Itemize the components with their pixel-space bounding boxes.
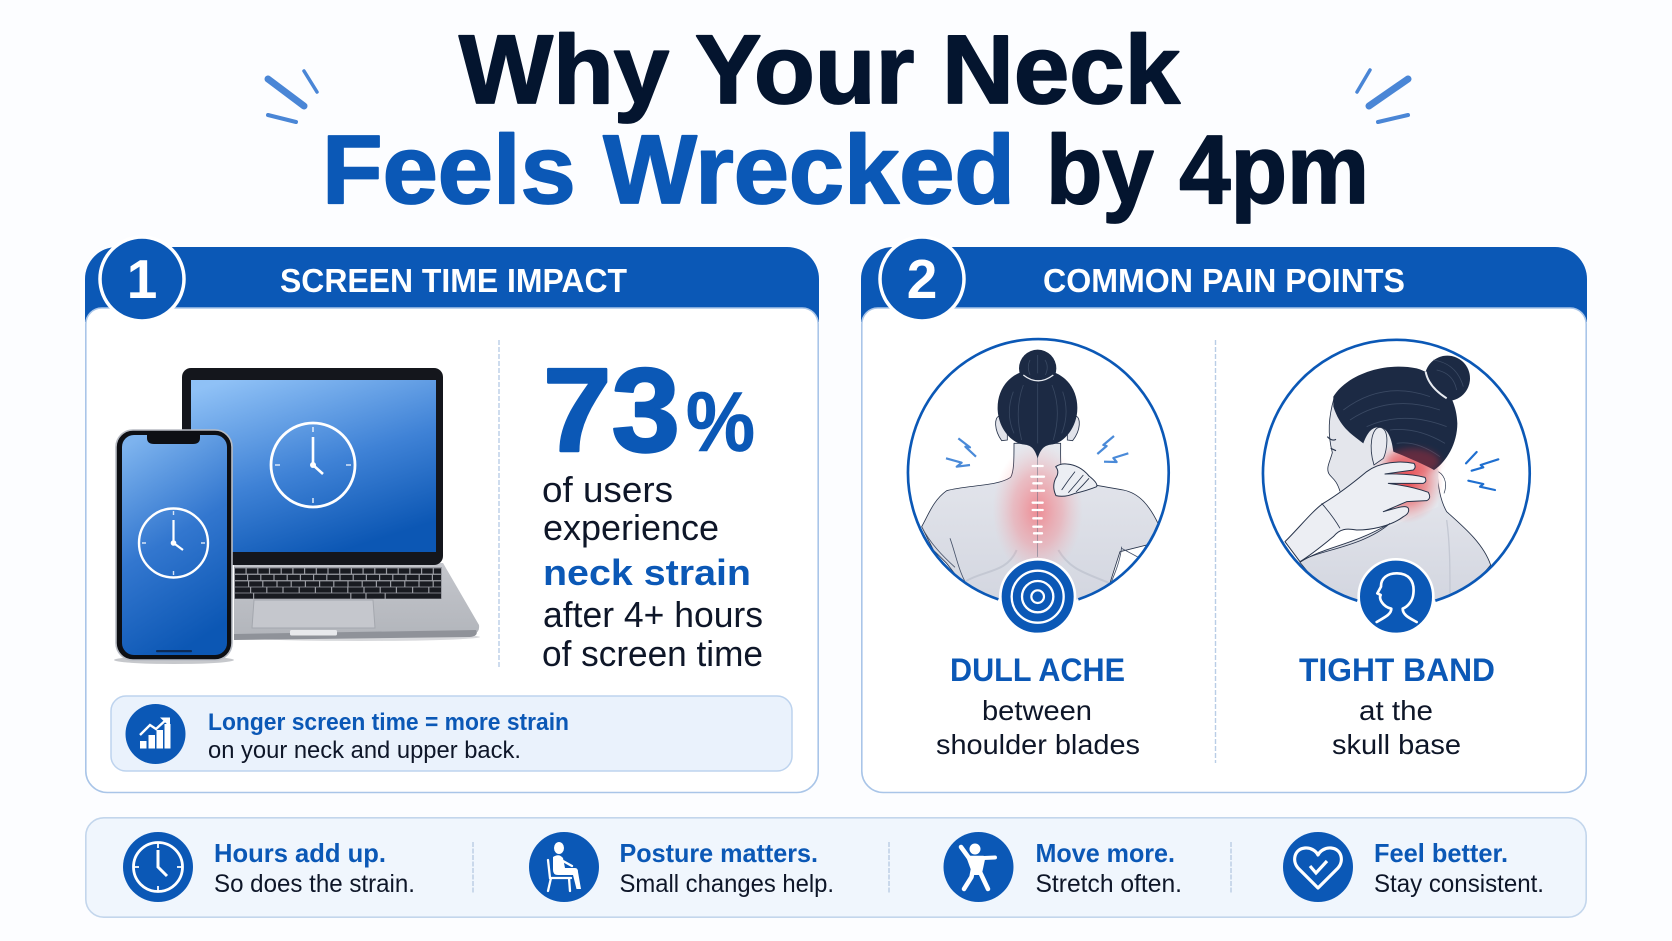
ear (1371, 427, 1387, 465)
pain glow along the spine (993, 443, 1083, 577)
text: stat description: experience (543, 507, 719, 548)
tip: hours add up (123, 832, 415, 902)
stat: 73%: 73 (543, 344, 680, 477)
ears (996, 416, 1079, 441)
label: dull ache (936, 652, 1140, 760)
tip: move more: Stretch often. (1036, 870, 1182, 898)
label: tight band: TIGHT BAND (1299, 652, 1495, 688)
title: Why Your Neck (459, 15, 1181, 124)
hand on neck (1285, 462, 1430, 562)
text: stat description: after 4+ hours (543, 594, 763, 635)
label: tight band: at the (1359, 695, 1433, 726)
icon: head silhouette badge (1359, 559, 1433, 634)
icon: target badge (1000, 559, 1075, 634)
panel header: screen time impact (85, 237, 819, 792)
label: dull ache: between (982, 695, 1092, 726)
callout: longer screen time: on your neck and upper back. (208, 737, 521, 764)
tip: posture matters: Small changes help. (620, 870, 834, 898)
text: stat description: neck strain (543, 552, 751, 593)
stat: 73% (543, 344, 755, 477)
circle outline (1263, 340, 1530, 601)
icon: heart with check (1283, 832, 1353, 902)
tip: hours add up: Hours add up. (214, 838, 386, 868)
tip: posture matters (529, 832, 834, 902)
hair and bun (1333, 356, 1470, 470)
illustration: side view tight band (1263, 340, 1530, 634)
illustration: back view dull ache (908, 339, 1169, 634)
pain bolts (1466, 452, 1498, 490)
panel header: screen time impact: 1 (127, 248, 157, 310)
title (322, 15, 1369, 224)
label: dull ache: shoulder blades (936, 729, 1140, 760)
title: Feels Wrecked (322, 115, 1015, 224)
figure body side view (1300, 479, 1491, 600)
pain bolts right (1097, 436, 1128, 462)
icon: clock (123, 832, 193, 902)
icon: rising bar chart (126, 704, 186, 764)
panel: screen time impact (85, 237, 819, 792)
text: stat description: of users (542, 469, 673, 510)
icon: seated person (529, 832, 599, 902)
panel header: common pain points (861, 237, 1587, 792)
label: tight band (1299, 652, 1495, 760)
label: dull ache: DULL ACHE (950, 652, 1125, 688)
icon: phone clock (139, 508, 208, 578)
panel: common pain points (861, 237, 1587, 792)
callout: longer screen time (111, 696, 792, 771)
tip: feel better: Stay consistent. (1374, 870, 1544, 898)
text: stat description: of screen time (542, 633, 763, 674)
panel header: common pain points: 2 (907, 248, 937, 310)
tip: feel better (1283, 832, 1544, 902)
panel header: common pain points: COMMON PAIN POINTS (1043, 262, 1405, 299)
title: by 4pm (1046, 115, 1369, 224)
stat: 73%: % (686, 375, 755, 469)
circle outline (908, 339, 1169, 599)
tip: move more (944, 832, 1182, 902)
panel header: screen time impact: SCREEN TIME IMPACT (280, 262, 627, 299)
icon: left accent strokes (268, 71, 317, 122)
pain glow at skull base (1370, 440, 1443, 523)
spine markers (1031, 452, 1044, 557)
figure body back view (922, 443, 1158, 610)
hair and bun (998, 350, 1077, 458)
label: tight band: skull base (1332, 729, 1461, 760)
text: stat description (542, 469, 763, 674)
pain bolts left (946, 438, 976, 467)
icon: right accent strokes (1357, 70, 1408, 122)
callout: longer screen time: Longer screen time = more strain (208, 709, 569, 736)
icon: phone (114, 430, 234, 664)
tip: feel better: Feel better. (1374, 838, 1508, 868)
icon: laptop clock (271, 423, 355, 507)
panel: bottom tips bar (86, 818, 1586, 917)
icon: stretching figure (944, 832, 1014, 902)
icon: laptop (182, 368, 480, 641)
red tint on lower hair (1387, 448, 1440, 475)
face and neck (1328, 398, 1438, 527)
hand on shoulder (1054, 464, 1097, 496)
tip: hours add up: So does the strain. (214, 870, 415, 898)
tip: posture matters: Posture matters. (620, 838, 818, 868)
tip: move more: Move more. (1036, 838, 1175, 868)
